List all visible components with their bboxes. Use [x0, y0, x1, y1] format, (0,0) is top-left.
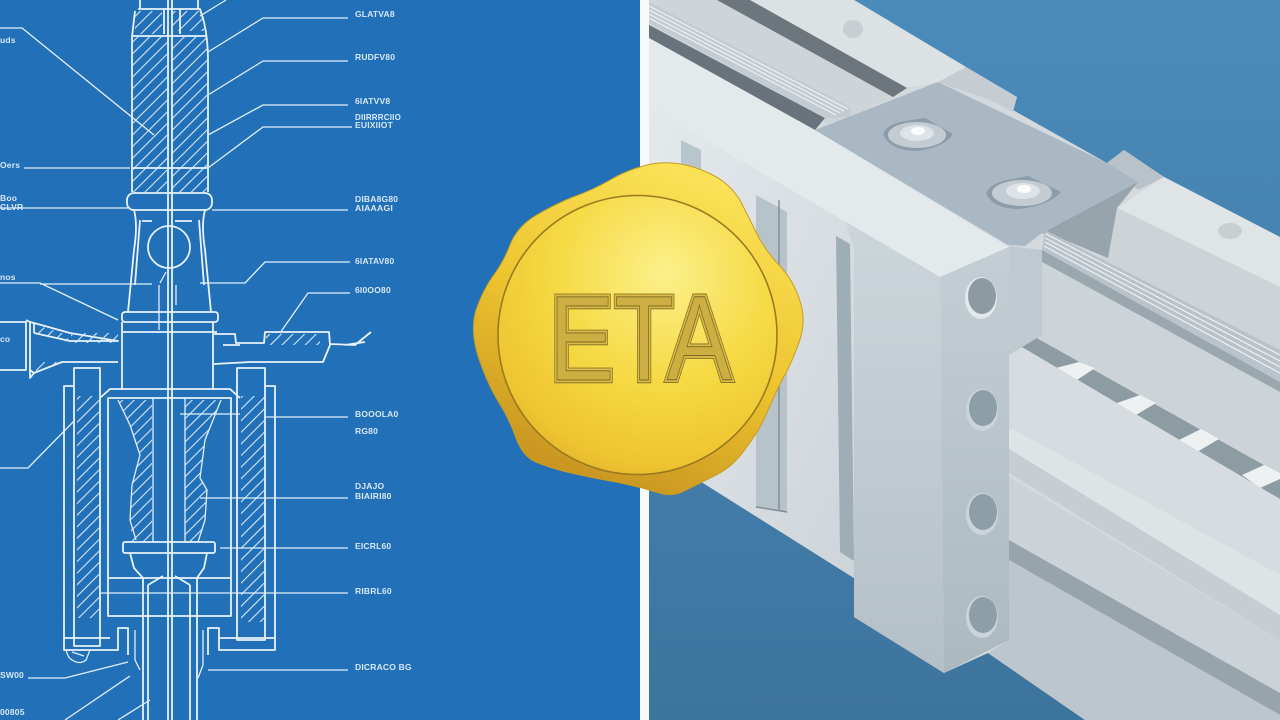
callout labels left: SW00	[0, 670, 24, 680]
flange	[122, 312, 218, 390]
callout labels right: EICRL60	[355, 541, 391, 551]
callout labels right: BIAIRI80	[355, 491, 392, 501]
callout labels right: GLATVA8	[355, 9, 395, 19]
callout labels right: DIBA8G80	[355, 194, 398, 204]
back rail	[649, 0, 1017, 130]
lower wall with channels	[649, 107, 854, 578]
profile assembly illustration	[649, 0, 1280, 720]
face between strip and ledge	[1009, 340, 1280, 575]
callout labels right	[355, 9, 412, 672]
icon: screw 1	[883, 118, 953, 151]
callout labels right: 6IATVV8	[355, 96, 390, 106]
leader lines	[0, 0, 352, 720]
column beneath plate	[1009, 246, 1042, 355]
seal inner disc	[498, 196, 777, 474]
end block right face	[940, 247, 1009, 673]
right wing	[214, 332, 371, 364]
callout labels left: 00805	[0, 707, 25, 717]
white centre divider	[640, 0, 649, 720]
icon: screw 2	[986, 176, 1061, 209]
seal outer wax edge	[473, 163, 803, 495]
steel plate with screws	[815, 82, 1138, 246]
callout labels right: RG80	[355, 426, 378, 436]
callout labels left: uds	[0, 35, 16, 45]
inner hatched sleeve	[118, 398, 221, 542]
callout labels right: RUDFV80	[355, 52, 395, 62]
ETA gold seal	[473, 163, 803, 495]
callout labels left: nos	[0, 272, 16, 282]
lower housing	[64, 368, 275, 655]
panel: blueprint background	[0, 0, 640, 720]
slotted strip	[1015, 326, 1280, 499]
callout labels left: co	[0, 334, 10, 344]
blueprint technical drawing	[0, 0, 412, 720]
seal lettering ETA: ETA	[549, 270, 732, 406]
hatched shaft	[132, 0, 208, 720]
lower stem and flange	[123, 542, 215, 720]
callout labels left	[0, 35, 25, 717]
callout labels right: DICRACO BG	[355, 662, 412, 672]
callout labels left: Oers	[0, 160, 20, 170]
left wing	[0, 320, 118, 378]
white top band	[649, 38, 1009, 277]
collar and neck	[127, 193, 212, 330]
end block left face	[846, 222, 944, 673]
callout labels right: 6I0OO80	[355, 285, 391, 295]
callout labels right: RIBRL60	[355, 586, 392, 596]
seal lettering ETA: ETA	[549, 270, 732, 406]
callout labels right: DIIRRRCIIO	[355, 112, 401, 122]
mounting holes	[965, 277, 998, 638]
callout labels left: Boo	[0, 193, 17, 203]
lower faces	[988, 477, 1280, 720]
seal lettering ETA: ETA	[549, 270, 732, 406]
callout labels right: DJAJO	[355, 481, 385, 491]
ribbed rail	[1009, 230, 1280, 474]
assembly base silhouette	[649, 0, 1280, 720]
callout labels right: 6IATAV80	[355, 256, 394, 266]
seal detail	[66, 650, 90, 662]
ledge	[991, 428, 1280, 640]
callout labels right: AIAAAGI	[355, 203, 393, 213]
callout labels left: CLVR	[0, 202, 23, 212]
right upper rail	[1042, 150, 1280, 355]
callout labels right: EUIXIIOT	[355, 120, 394, 130]
panel: product background	[648, 0, 1280, 720]
callout labels right: BOOOLA0	[355, 409, 399, 419]
